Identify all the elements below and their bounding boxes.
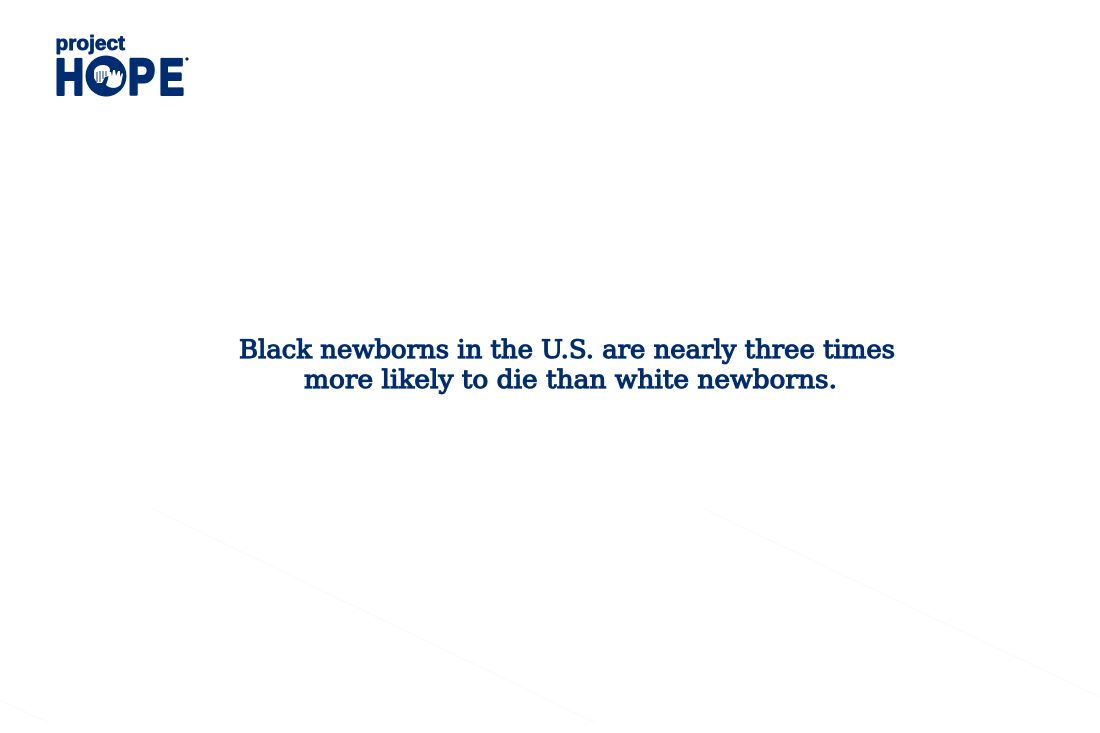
logo word: project: project (56, 33, 125, 55)
background diagonal pattern (0, 508, 1100, 723)
logo: Project HOPE (55, 33, 189, 106)
registered mark (185, 57, 189, 61)
logo word: HOPE: P (128, 48, 155, 106)
headline line 2: more likely to die than white newborns. (304, 365, 837, 394)
headline (239, 335, 895, 394)
icon: globe with two hands (86, 56, 126, 96)
logo word: HOPE: O (89, 48, 123, 106)
logo word: HOPE: H (55, 48, 84, 106)
headline line 1: Black newborns in the U.S. are nearly three times (239, 335, 895, 364)
logo word: HOPE: E (159, 48, 184, 106)
